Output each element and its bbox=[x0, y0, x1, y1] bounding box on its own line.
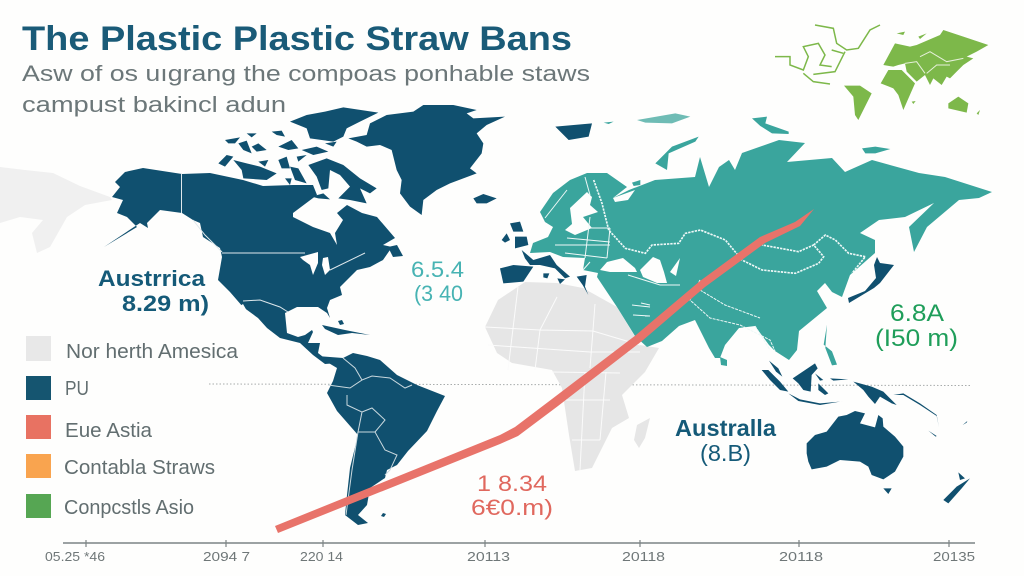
label: Americas: Austrrica bbox=[98, 266, 206, 291]
label: Atlantic value: (3 40 bbox=[414, 281, 463, 306]
faint grey landmass at far left bbox=[0, 167, 112, 253]
legend item: compostables bbox=[26, 494, 194, 519]
subtitle: Asw of os uıgrang the compoas ponhable staws bbox=[22, 61, 590, 86]
trend arrow bbox=[275, 209, 814, 533]
timeline axis: 05.25 *46 bbox=[45, 549, 105, 564]
timeline axis: 20118 bbox=[779, 549, 823, 564]
timeline axis: 20113 bbox=[467, 549, 510, 564]
label: Asia value: 6.8A bbox=[890, 300, 944, 327]
title: The Plastic Plastic Straw Bans bbox=[22, 20, 572, 58]
label: Australia bbox=[675, 415, 776, 466]
map: New Zealand bbox=[943, 472, 970, 503]
legend item: North America bbox=[26, 336, 239, 363]
Newfoundland bbox=[388, 245, 403, 257]
Baja gulf bbox=[240, 304, 258, 327]
legend item: EU: PU bbox=[65, 378, 89, 400]
label: Atlantic value bbox=[411, 257, 464, 306]
map: Svalbard bbox=[555, 123, 592, 140]
label: Atlantic value: 6.5.4 bbox=[411, 257, 464, 282]
map: Greenland bbox=[348, 105, 505, 215]
label: Australia: (8.B) bbox=[700, 440, 751, 466]
legend item: North America: Nor herth Amesica bbox=[66, 341, 239, 363]
legend bbox=[26, 336, 239, 519]
equator dotted line bbox=[209, 384, 970, 386]
legend item: straws: Contabla Straws bbox=[64, 457, 215, 479]
map: Southeast Asia islands bbox=[762, 361, 967, 437]
timeline axis: 20118 bbox=[622, 549, 665, 564]
map: Western Europe and Iceland bbox=[473, 194, 588, 295]
timeline axis: 220 14 bbox=[300, 549, 343, 564]
map: Eurasia in teal bbox=[530, 113, 992, 366]
inset world map bbox=[775, 25, 988, 120]
label: Asia value: (I50 m) bbox=[875, 325, 958, 352]
legend item: compostables: Conpcstls Asio bbox=[64, 497, 194, 519]
map: Africa in grey bbox=[485, 282, 659, 471]
Great Lakes bbox=[300, 252, 318, 275]
label: trend value: 1 8.34 bbox=[477, 471, 547, 496]
timeline axis: 20135 bbox=[933, 549, 975, 564]
legend item: Asia: Eue Astia bbox=[65, 420, 153, 442]
timeline axis: 2094 7 bbox=[203, 549, 250, 564]
label: Australia: Australla bbox=[675, 415, 776, 441]
legend item: Asia bbox=[26, 415, 153, 442]
legend item: EU bbox=[26, 376, 89, 400]
subtitle: campust bakincl adun bbox=[22, 92, 286, 117]
inland seas cut-outs bbox=[565, 190, 680, 283]
Arctic islands bbox=[218, 107, 378, 203]
Taiwan and Philippines bbox=[824, 325, 837, 365]
timeline axis bbox=[45, 540, 975, 564]
label: Americas: 8.29 m) bbox=[122, 291, 209, 316]
subtitle bbox=[22, 61, 590, 117]
map: South America bbox=[317, 353, 445, 525]
label: trend value bbox=[471, 471, 553, 520]
legend item: straws bbox=[26, 454, 215, 479]
borders bbox=[182, 174, 365, 312]
map: Japan bbox=[848, 257, 894, 303]
label: trend value: 6€0.m) bbox=[471, 495, 553, 520]
map: North America bbox=[104, 107, 403, 364]
Sri Lanka bbox=[720, 357, 727, 366]
map: Australia bbox=[807, 411, 903, 494]
country borders bbox=[594, 180, 865, 273]
label: Americas bbox=[98, 266, 209, 316]
label: Asia value bbox=[875, 300, 958, 352]
Caribbean bbox=[322, 325, 370, 335]
